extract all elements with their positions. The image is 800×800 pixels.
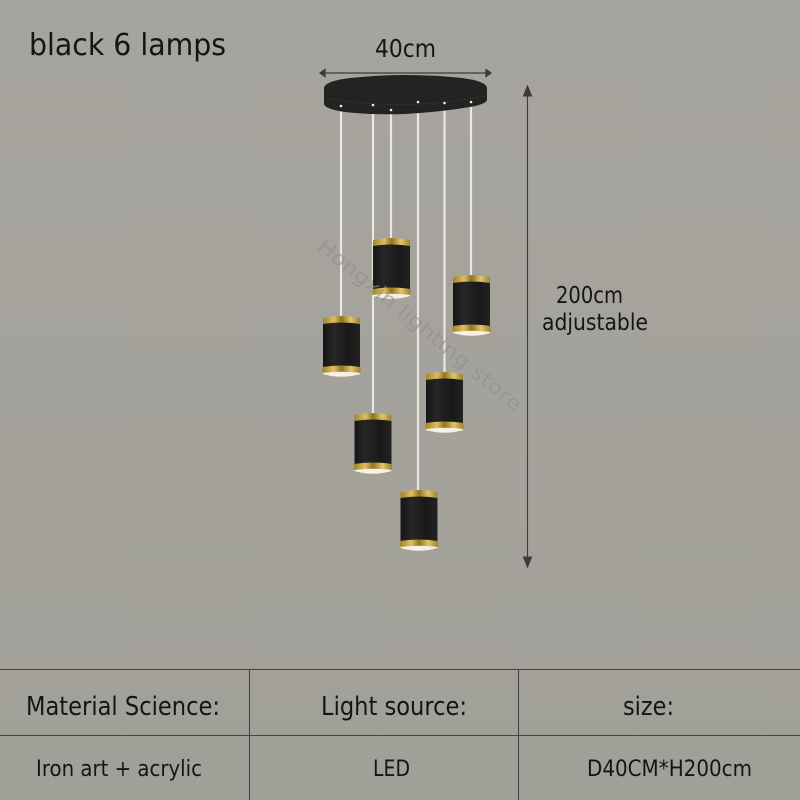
value: light source: LED (373, 756, 410, 782)
wires (341, 102, 471, 491)
header: size: size: (623, 692, 674, 722)
lamp 2 (452, 275, 490, 336)
lamp 5 (354, 413, 392, 474)
table lines (0, 669, 800, 800)
title: black 6 lamps (29, 28, 226, 63)
header: material: Material Science: (26, 692, 220, 722)
width dimension (320, 34, 491, 76)
value: size: D40CM*H200cm (587, 756, 752, 782)
specification table (0, 669, 800, 800)
header: light source: Light source: (321, 692, 467, 722)
lamp 6 (400, 490, 438, 551)
height label (542, 283, 648, 336)
width arrow (320, 70, 491, 76)
ceiling canopy (324, 75, 487, 114)
lamp 4 (426, 372, 464, 433)
width label: 40cm (375, 34, 436, 63)
value: material: Iron art + acrylic (36, 756, 202, 782)
height label: 200cm (556, 283, 623, 309)
lamp 3 (322, 316, 360, 377)
watermark: Hongxin lighting store (313, 233, 527, 416)
height label: adjustable (542, 310, 648, 336)
wire ends at canopy (340, 101, 472, 111)
height arrow (524, 86, 532, 567)
lamp 1 (372, 238, 410, 299)
